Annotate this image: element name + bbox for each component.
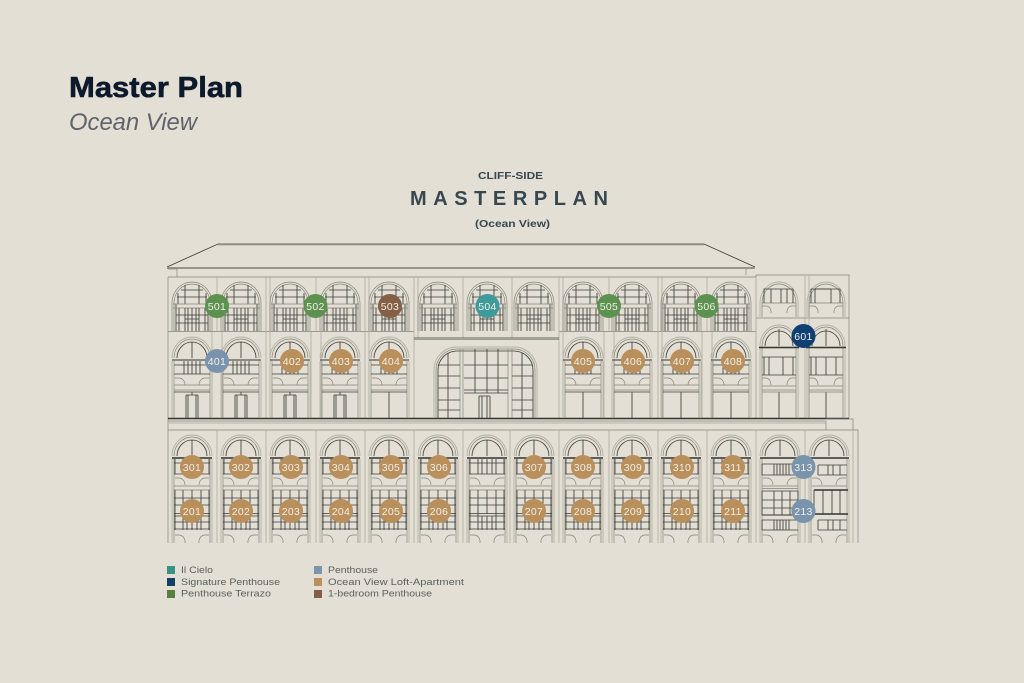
unit 210 (670, 499, 694, 523)
unit 407: 407 (673, 356, 691, 368)
unit 311 (721, 455, 745, 479)
unit 306 (427, 455, 451, 479)
legend: Penthouse Terrazo: Penthouse Terrazo (181, 588, 271, 600)
walls and floor lines (168, 275, 858, 543)
legend: Ocean View Loft-Apartment: Ocean View Loft-Apartment (328, 577, 464, 588)
unit 311: 311 (724, 462, 742, 474)
fifth floor windows (172, 282, 751, 331)
lower floor windows (172, 435, 751, 543)
unit 601: 601 (794, 331, 813, 343)
tower windows (759, 282, 846, 418)
unit markers (180, 294, 816, 523)
unit 401 (205, 349, 229, 373)
unit 206: 206 (430, 506, 448, 518)
unit 501: 501 (208, 301, 226, 313)
subtitle: Ocean View (69, 109, 199, 136)
unit 301: 301 (183, 462, 201, 474)
unit 211 (721, 499, 745, 523)
legend: Il Cielo: Il Cielo (181, 565, 213, 576)
legend: Signature Penthouse: Signature Penthouse (181, 577, 280, 588)
title: Master Plan (69, 72, 243, 104)
unit 403: 403 (332, 356, 350, 368)
unit 302 (229, 455, 253, 479)
unit 304: 304 (332, 462, 350, 474)
unit 208: 208 (574, 506, 592, 518)
unit 402 (280, 349, 304, 373)
unit 502 (304, 294, 328, 318)
central arched window (434, 347, 537, 418)
unit 505 (597, 294, 621, 318)
unit 202: 202 (232, 506, 250, 518)
unit 303 (279, 455, 303, 479)
unit 201: 201 (183, 506, 201, 518)
unit 504 (476, 294, 500, 318)
unit 201 (180, 499, 204, 523)
unit 203: 203 (282, 506, 300, 518)
unit 501 (205, 294, 229, 318)
unit 406 (621, 349, 645, 373)
unit 307: 307 (525, 462, 543, 474)
unit 408: 408 (724, 356, 742, 368)
unit 405 (571, 349, 595, 373)
unit 404: 404 (382, 356, 400, 368)
unit 402: 402 (283, 356, 301, 368)
unit 503 (378, 294, 402, 318)
unit 204: 204 (332, 506, 350, 518)
unit 307 (522, 455, 546, 479)
unit 506 (694, 294, 718, 318)
unit 601 (792, 324, 816, 348)
legend: Il Cielo (167, 565, 213, 576)
unit 209 (621, 499, 645, 523)
unit 502: 502 (306, 301, 325, 313)
plan heading (410, 170, 608, 230)
unit 406: 406 (624, 356, 642, 368)
unit 405: 405 (574, 356, 592, 368)
unit 302: 302 (232, 462, 250, 474)
unit 202 (229, 499, 253, 523)
unit 403 (329, 349, 353, 373)
tower lower windows (760, 435, 849, 543)
fourth floor windows (172, 337, 751, 418)
unit 308 (571, 455, 595, 479)
building elevation (167, 244, 858, 543)
unit 211: 211 (724, 506, 742, 518)
legend: 1-bedroom Penthouse: 1-bedroom Penthouse (328, 588, 432, 600)
panel: masterplan backdrop (68, 165, 955, 615)
unit 308: 308 (574, 462, 592, 474)
unit 401: 401 (208, 356, 226, 368)
unit 205: 205 (382, 506, 400, 518)
unit 504: 504 (478, 301, 497, 313)
plan heading: MASTERPLAN (410, 188, 608, 210)
unit 207 (522, 499, 546, 523)
unit 309 (621, 455, 645, 479)
unit 506: 506 (697, 301, 716, 313)
unit 310 (670, 455, 694, 479)
unit 303: 303 (282, 462, 300, 474)
unit 407 (670, 349, 694, 373)
unit 505: 505 (600, 301, 618, 313)
unit 209: 209 (624, 506, 642, 518)
unit 306: 306 (430, 462, 448, 474)
unit 301 (180, 455, 204, 479)
unit 207: 207 (525, 506, 543, 518)
legend (167, 565, 464, 600)
plan heading: (Ocean View) (475, 218, 550, 230)
unit 304 (329, 455, 353, 479)
unit 204 (329, 499, 353, 523)
roof (167, 244, 755, 277)
unit 208 (571, 499, 595, 523)
unit 313 (792, 455, 816, 479)
unit 210: 210 (673, 506, 691, 518)
unit 310: 310 (673, 462, 691, 474)
unit 503: 503 (381, 301, 399, 313)
unit 205 (379, 499, 403, 523)
unit 408 (721, 349, 745, 373)
unit 313: 313 (794, 462, 813, 474)
unit 404 (379, 349, 403, 373)
plan heading: CLIFF-SIDE (478, 170, 543, 182)
unit 213 (792, 499, 816, 523)
unit 305: 305 (382, 462, 400, 474)
unit 213: 213 (794, 506, 813, 518)
unit 203 (279, 499, 303, 523)
unit 309: 309 (624, 462, 642, 474)
unit 206 (427, 499, 451, 523)
legend: Penthouse: Penthouse (328, 565, 378, 576)
unit 305 (379, 455, 403, 479)
